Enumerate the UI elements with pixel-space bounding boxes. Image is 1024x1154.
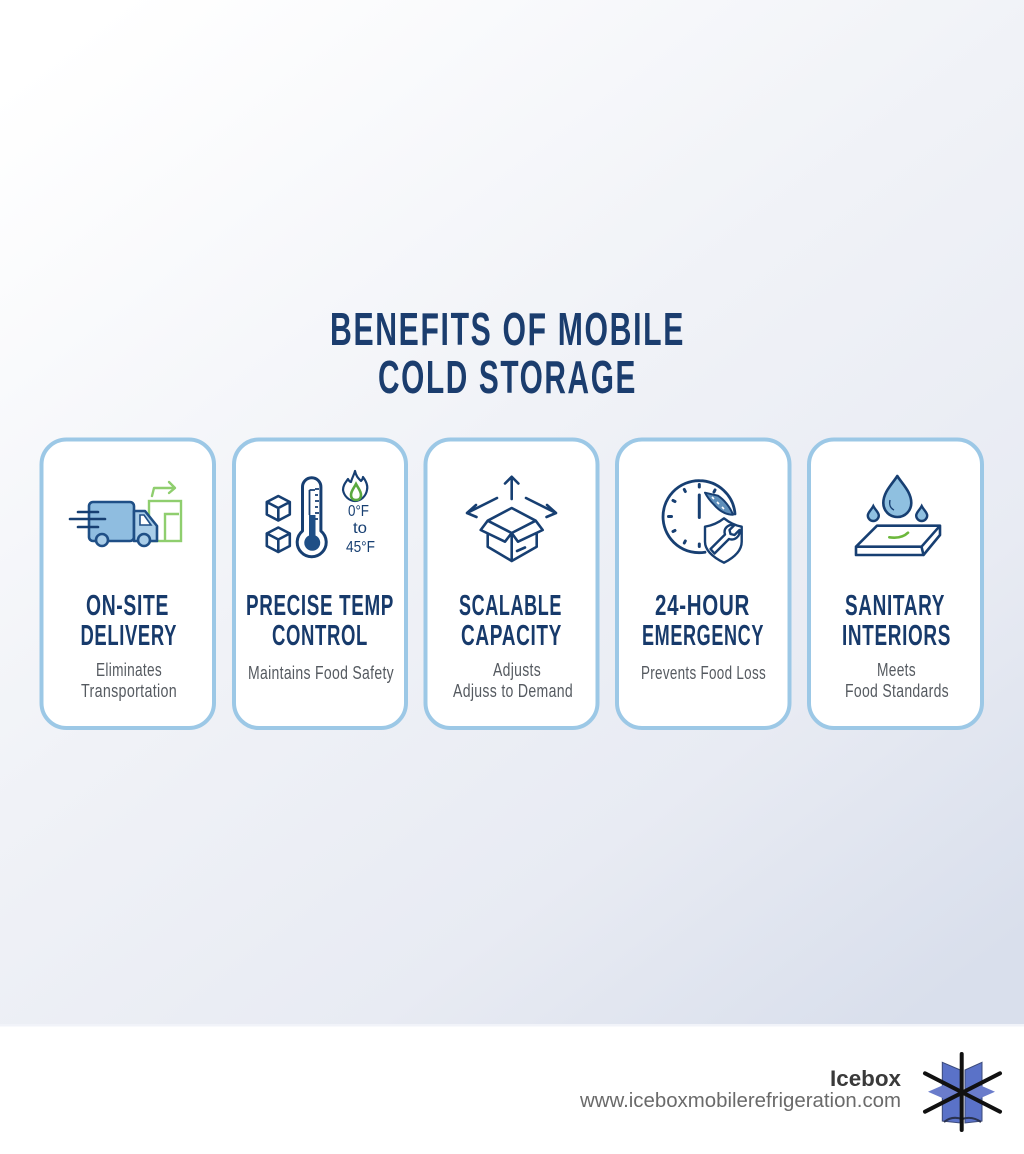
heading: precise temp control: PRECISE TEMP — [246, 590, 394, 622]
heading: on-site delivery: DELIVERY — [80, 620, 177, 652]
icon: thermometer with ice cubes and flame: 0°F — [348, 503, 369, 520]
title: BENEFITS OF MOBILE — [330, 303, 685, 355]
description: on-site delivery: Transportation — [81, 681, 177, 701]
description: on-site delivery — [81, 660, 177, 701]
panel: precise temp control — [234, 440, 406, 728]
description: scalable capacity — [453, 660, 573, 701]
icon: thermometer with ice cubes and flame — [267, 471, 375, 557]
description: sanitary interiors: Food Standards — [845, 681, 949, 701]
footer — [0, 1024, 1024, 1154]
panel: 24-hour emergency — [617, 440, 790, 728]
brand name: Icebox — [830, 1066, 902, 1091]
heading: scalable capacity — [459, 590, 562, 652]
icon: open box with arrows — [467, 477, 556, 561]
heading: scalable capacity: SCALABLE — [459, 590, 562, 622]
heading: on-site delivery: ON-SITE — [86, 590, 169, 622]
icon: delivery truck — [70, 482, 181, 546]
heading: on-site delivery — [80, 590, 177, 652]
panel: sanitary interiors — [809, 440, 982, 728]
icon: water drops on surface — [856, 476, 940, 555]
heading: 24-hour emergency: EMERGENCY — [642, 620, 764, 652]
logo: snowflake — [925, 1054, 1000, 1130]
description: scalable capacity: Adjusts — [493, 660, 541, 680]
heading: 24-hour emergency — [642, 590, 764, 652]
panel: on-site delivery — [42, 440, 214, 728]
heading: sanitary interiors — [842, 590, 951, 652]
description: sanitary interiors — [845, 660, 949, 701]
heading: precise temp control — [246, 590, 394, 652]
heading: scalable capacity: CAPACITY — [461, 620, 562, 652]
website url: www.iceboxmobilerefrigeration.com — [579, 1090, 901, 1112]
description: sanitary interiors: Meets — [877, 660, 916, 680]
description: precise temp control: Maintains Food Safety — [248, 663, 394, 683]
heading: sanitary interiors: SANITARY — [845, 590, 945, 622]
heading: sanitary interiors: INTERIORS — [842, 620, 951, 652]
description: on-site delivery: Eliminates — [96, 660, 162, 680]
description: scalable capacity: Adjuss to Demand — [453, 681, 573, 701]
icon: thermometer with ice cubes and flame: 45°F — [346, 539, 375, 556]
heading: 24-hour emergency: 24-HOUR — [655, 590, 750, 622]
title — [330, 303, 685, 403]
icon: clock with shield and wrench — [663, 481, 742, 563]
title: COLD STORAGE — [378, 351, 637, 403]
panel: scalable capacity — [426, 440, 598, 728]
icon: thermometer with ice cubes and flame: to — [353, 520, 367, 537]
description: 24-hour emergency: Prevents Food Loss — [641, 663, 766, 683]
heading: precise temp control: CONTROL — [272, 620, 368, 652]
